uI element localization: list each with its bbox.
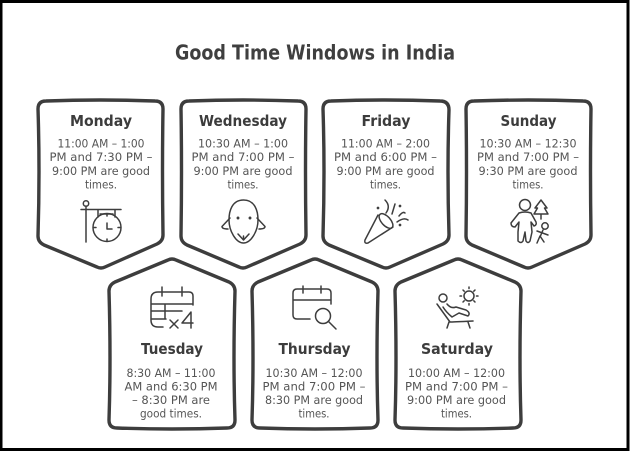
text: Saturday times: 9:00 PM are good: [407, 393, 506, 407]
text: Wednesday times: 10:30 AM – 1:00: [198, 136, 288, 150]
heading: Monday: Monday: [70, 112, 132, 130]
text: Saturday times: [405, 366, 508, 420]
text: Tuesday times: – 8:30 PM are: [132, 393, 210, 407]
panel: Saturday: [395, 259, 521, 429]
text: Tuesday times: 8:30 AM – 11:00: [126, 366, 216, 380]
text: Monday times: 9:00 PM are good: [52, 164, 150, 178]
icon: person in deck chair under sun: [437, 287, 478, 328]
text: Friday times: times.: [370, 178, 401, 192]
panel: Monday: [38, 100, 163, 268]
text: Saturday times: 10:00 AM – 12:00: [408, 366, 505, 380]
panel: Tuesday: [109, 259, 235, 429]
heading: Wednesday: Wednesday: [199, 112, 287, 130]
text: Friday times: 9:00 PM are good: [336, 164, 434, 178]
text: Sunday times: [477, 136, 579, 192]
text: Monday times: PM and 7:30 PM –: [50, 150, 153, 164]
panel: Sunday: [466, 100, 591, 268]
text: Saturday times: times.: [441, 406, 472, 420]
text: Saturday times: PM and 7:00 PM –: [405, 380, 508, 394]
text: Sunday times: times.: [512, 178, 544, 192]
heading: Tuesday: Tuesday: [141, 340, 203, 358]
text: Wednesday times: 9:00 PM are good: [194, 164, 292, 178]
text: Thursday times: 8:30 PM are good: [265, 393, 363, 407]
text: Thursday times: [262, 366, 366, 420]
heading: Friday: Friday: [362, 112, 411, 130]
text: Sunday times: 9:30 PM are good: [478, 164, 578, 178]
icon: sheep face: [222, 200, 265, 243]
text: Thursday times: PM and 7:00 PM –: [262, 380, 366, 394]
icon: hanging clock sign: [81, 201, 121, 242]
panel: Wednesday: [181, 100, 306, 268]
heading: Saturday: Saturday: [421, 340, 493, 358]
heading: Sunday: Sunday: [500, 112, 557, 130]
text: Thursday times: 10:30 AM – 12:00: [266, 366, 362, 380]
panel: Friday: [323, 100, 449, 268]
title: Good Time Windows in India: [175, 40, 455, 64]
heading: Thursday: Thursday: [278, 340, 351, 358]
text: Wednesday times: PM and 7:00 PM –: [192, 150, 295, 164]
text: Tuesday times: [124, 366, 218, 420]
icon: calendar with magnifier: [293, 286, 336, 329]
text: Wednesday times: [192, 136, 295, 192]
text: Wednesday times: times.: [228, 178, 258, 192]
text: Friday times: [334, 136, 437, 192]
icon: calendar times four: [151, 287, 193, 328]
text: Friday times: 11:00 AM – 2:00: [341, 136, 430, 150]
icon: party popper: [365, 200, 408, 243]
text: Monday times: 11:00 AM – 1:00: [58, 136, 144, 150]
panel: Thursday: [252, 259, 378, 429]
text: Tuesday times: good times.: [140, 406, 202, 420]
text: Tuesday times: AM and 6:30 PM: [124, 380, 218, 394]
text: Monday times: [50, 136, 153, 192]
icon: adult, child and tree: [511, 200, 548, 243]
text: Friday times: PM and 6:00 PM –: [334, 150, 437, 164]
text: Sunday times: 10:30 AM – 12:30: [480, 136, 576, 150]
text: Thursday times: times.: [298, 406, 330, 420]
text: Sunday times: PM and 7:00 PM –: [477, 150, 579, 164]
text: Monday times: times.: [85, 178, 117, 192]
